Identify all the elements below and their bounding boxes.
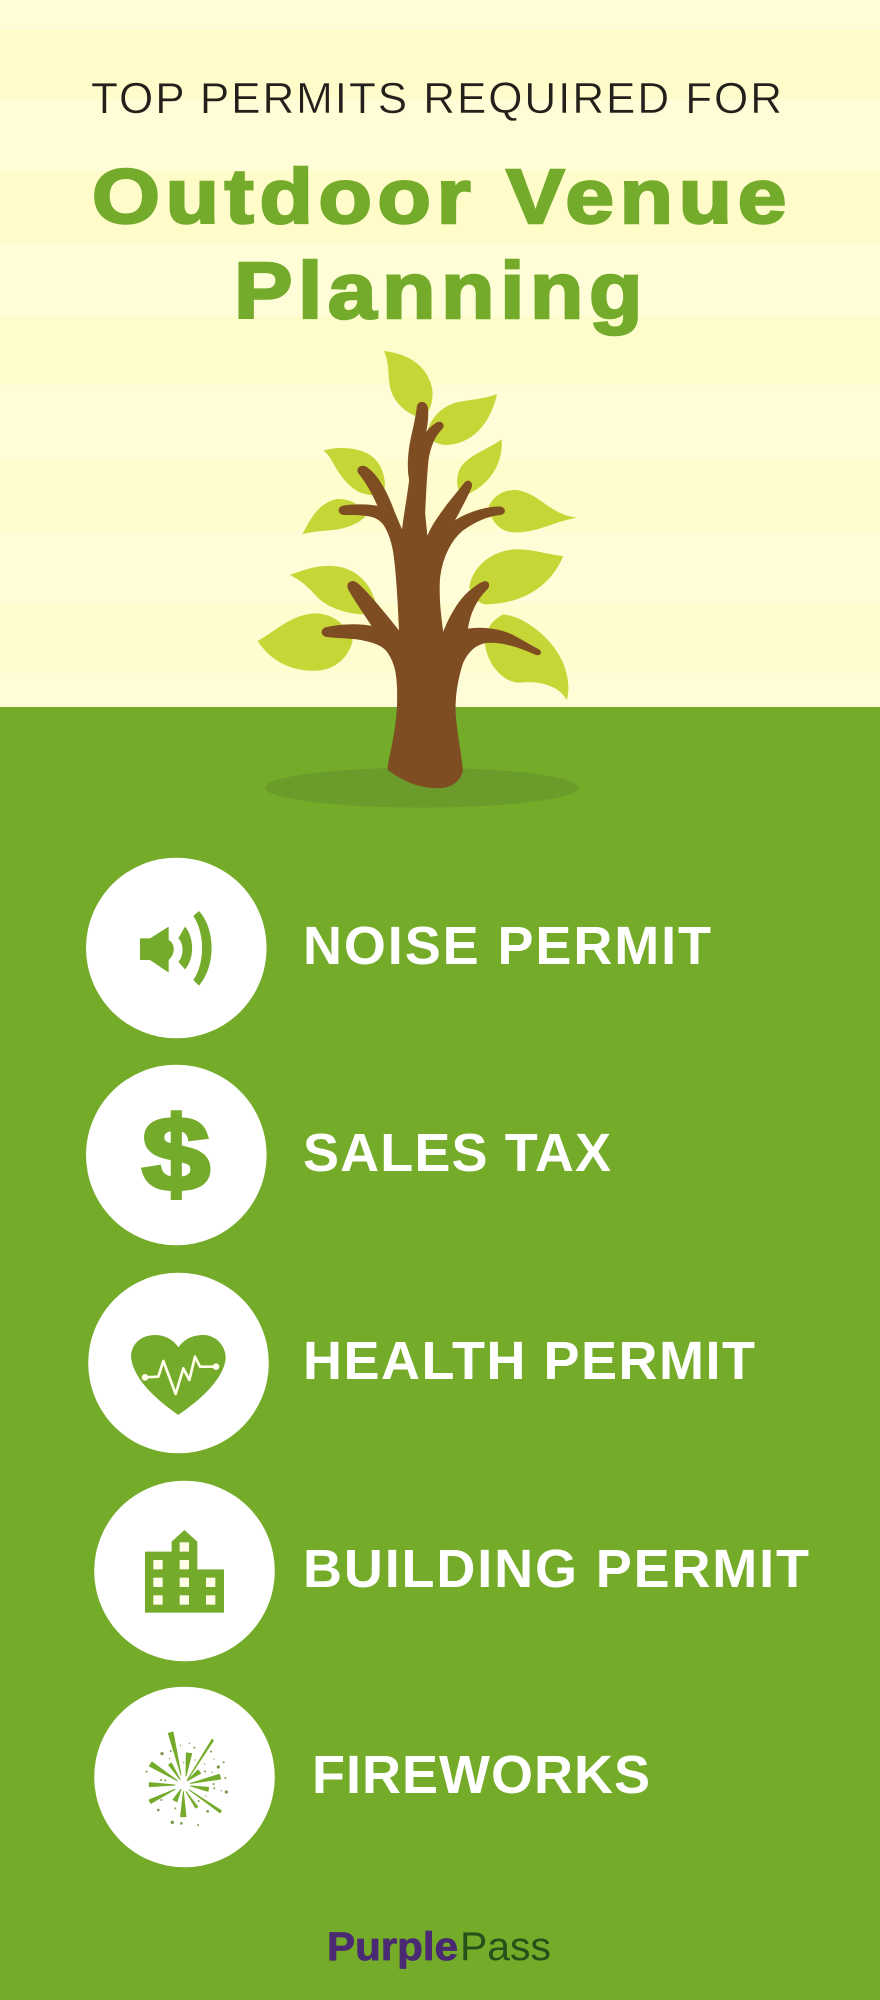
circle	[86, 858, 267, 1038]
label: NOISE PERMIT	[303, 916, 711, 976]
icon: speaker	[140, 911, 212, 986]
label: BUILDING PERMIT	[303, 1539, 809, 1599]
trunk and branches	[323, 403, 540, 787]
circle	[88, 1273, 269, 1453]
logo: PurplePass	[327, 1925, 551, 1969]
icon: building	[145, 1530, 224, 1613]
title: Outdoor Venue: Outdoor Venue	[92, 154, 792, 240]
icon: dollar sign: $	[142, 1096, 210, 1213]
tree shadow	[265, 768, 578, 808]
list item: fireworks	[94, 1687, 650, 1867]
label: HEALTH PERMIT	[303, 1331, 755, 1391]
list item: building permit	[94, 1481, 809, 1661]
list item: noise permit	[86, 858, 711, 1038]
title: Planning: Planning	[234, 246, 648, 335]
list item: sales tax	[86, 1065, 611, 1245]
icon: heart with pulse	[131, 1335, 226, 1415]
label: SALES TAX	[303, 1123, 611, 1183]
panel: striped sky background	[0, 0, 880, 707]
panel: green ground	[0, 707, 880, 2000]
illustration: tree with leaves	[258, 351, 578, 808]
logo word: Purple: Purple	[327, 1925, 458, 1969]
icon: fireworks burst	[146, 1732, 228, 1826]
label: FIREWORKS	[312, 1745, 650, 1805]
circle	[94, 1481, 275, 1661]
logo word: Pass: Pass	[460, 1925, 551, 1969]
circle	[94, 1687, 275, 1867]
circle	[86, 1065, 267, 1245]
leaves	[258, 351, 577, 700]
list item: health permit	[88, 1273, 755, 1453]
title: top line: TOP PERMITS REQUIRED FOR	[91, 74, 782, 123]
